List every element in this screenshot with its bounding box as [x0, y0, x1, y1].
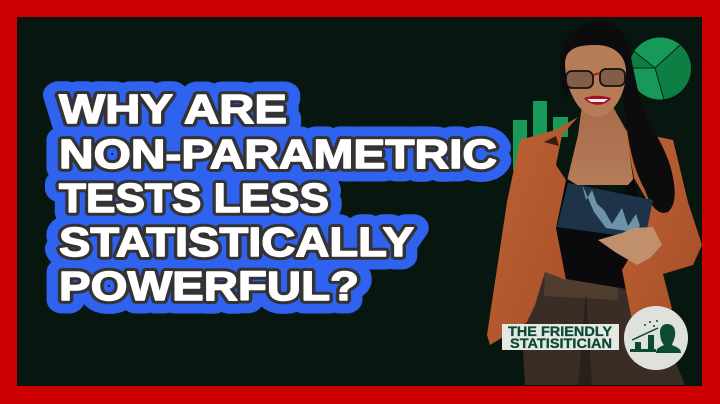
- title white fill: WHY ARE: [59, 86, 287, 132]
- title blue outline: WHY ARE: [59, 86, 287, 132]
- title: Why are non-parametric tests less statistically powerful?: [59, 86, 497, 309]
- lapel shadow: [544, 136, 559, 146]
- title dark outline: [59, 86, 497, 309]
- black top: [555, 178, 648, 290]
- title dark outline: NON-PARAMETRIC: [59, 131, 497, 177]
- blazer left: [487, 117, 578, 345]
- title white fill: TESTS LESS: [59, 175, 329, 221]
- hair top: [562, 24, 628, 66]
- face: [565, 45, 626, 117]
- tablet: [557, 183, 653, 239]
- figure: woman presenting: [487, 21, 702, 385]
- lips: [584, 96, 611, 105]
- title dark outline: STATISTICALLY: [59, 219, 414, 265]
- title white fill: [59, 86, 497, 309]
- title dark outline: TESTS LESS: [59, 175, 329, 221]
- bar chart: [513, 101, 568, 170]
- logo badge: [624, 306, 688, 370]
- neck and chest: [566, 105, 634, 185]
- title dark outline: WHY ARE: [59, 86, 287, 132]
- glasses: [566, 69, 625, 88]
- title white fill: STATISTICALLY: [59, 219, 414, 265]
- title blue outline: [59, 86, 497, 309]
- trousers: [522, 272, 685, 385]
- title white fill: POWERFUL?: [59, 263, 359, 309]
- logo bars and arrow: [630, 320, 658, 352]
- logo label: The Friendly Statistician: STATISITICIAN: [510, 336, 612, 351]
- long hair: [560, 21, 675, 213]
- logo label: The Friendly Statistician: THE FRIENDLY: [508, 324, 612, 339]
- blazer right: [622, 130, 702, 320]
- icon: green pie chart: [631, 38, 691, 100]
- title blue outline: NON-PARAMETRIC: [59, 131, 497, 177]
- title white fill: NON-PARAMETRIC: [59, 131, 497, 177]
- title dark outline: POWERFUL?: [59, 263, 359, 309]
- logo label: The Friendly Statistician: [502, 324, 619, 351]
- hand: [598, 227, 662, 265]
- title blue outline: POWERFUL?: [59, 263, 359, 309]
- title blue outline: STATISTICALLY: [59, 219, 414, 265]
- title blue outline: TESTS LESS: [59, 175, 329, 221]
- logo person silhouette: [656, 324, 681, 353]
